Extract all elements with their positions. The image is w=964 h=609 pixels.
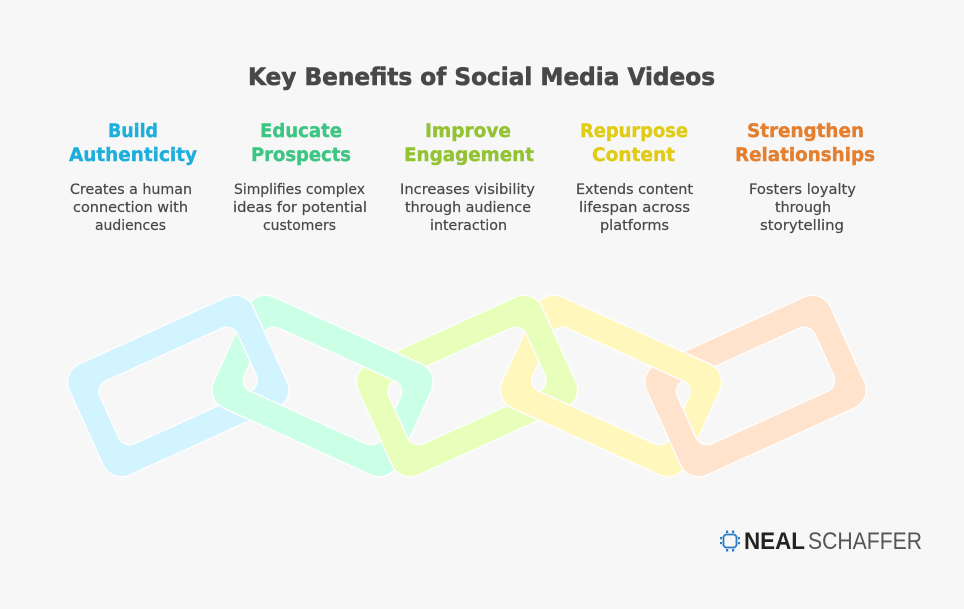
chain of five interlocking links <box>61 289 873 483</box>
description: Strengthen Relationships <box>749 182 856 234</box>
link: blue <box>61 289 295 483</box>
description: Improve Engagement: Increases visibility <box>400 182 535 198</box>
column: Strengthen Relationships <box>735 120 875 234</box>
column: Improve Engagement <box>400 120 535 234</box>
heading: Improve Engagement: Engagement <box>404 144 534 166</box>
description: Improve Engagement <box>400 182 535 234</box>
description: Build Authenticity: audiences <box>95 218 166 234</box>
link: green <box>205 289 440 483</box>
description: Educate Prospects: Simplifies complex <box>234 182 365 198</box>
heading: Strengthen Relationships: Relationships <box>735 144 875 166</box>
heading: Improve Engagement: Improve <box>425 120 511 142</box>
description: Build Authenticity: Creates a human <box>70 182 192 198</box>
wordmark <box>744 528 922 555</box>
description: Build Authenticity: connection with <box>73 200 188 216</box>
link: lime <box>350 289 584 483</box>
heading: Educate Prospects: Educate <box>260 120 342 142</box>
description: Improve Engagement: interaction <box>430 218 507 234</box>
description: Educate Prospects: customers <box>263 218 336 234</box>
description: Strengthen Relationships: Fosters loyalty <box>749 182 856 198</box>
heading: Improve Engagement <box>404 120 534 166</box>
heading: Repurpose Content: Content <box>592 144 675 166</box>
heading: Strengthen Relationships <box>735 120 875 166</box>
description: Repurpose Content <box>576 182 694 234</box>
wordmark: NEAL <box>744 528 805 555</box>
description: Strengthen Relationships: storytelling <box>760 218 844 234</box>
description: Educate Prospects: ideas for potential <box>233 200 367 216</box>
title: Key Benefits of Social Media Videos <box>248 63 715 91</box>
description: Strengthen Relationships: through <box>775 200 831 216</box>
link: lime overlap over yellow <box>483 302 571 405</box>
column: Build Authenticity <box>69 120 198 234</box>
heading: Educate Prospects: Prospects <box>251 144 351 166</box>
link: green overlap over lime <box>364 352 426 384</box>
heading: Build Authenticity <box>69 120 198 166</box>
link: yellow overlap over orange <box>625 330 717 397</box>
description: Repurpose Content: platforms <box>600 218 669 234</box>
heading: Repurpose Content: Repurpose <box>580 120 688 142</box>
heading: Strengthen Relationships: Strengthen <box>747 120 864 142</box>
heading: Build Authenticity: Build <box>108 120 158 142</box>
heading: Repurpose Content <box>580 120 688 166</box>
heading: Build Authenticity: Authenticity <box>69 144 198 166</box>
description: Improve Engagement: through audience <box>405 200 531 216</box>
link: blue overlap over green <box>195 302 282 404</box>
logo: Neal Schaffer <box>720 528 922 555</box>
heading: Educate Prospects <box>251 120 351 166</box>
description: Educate Prospects <box>233 182 367 234</box>
column: Repurpose Content <box>576 120 694 234</box>
description: Repurpose Content: Extends content <box>576 182 694 198</box>
description: Build Authenticity <box>70 182 192 234</box>
link: yellow <box>494 289 728 483</box>
link: orange <box>638 289 873 483</box>
description: Repurpose Content: lifespan across <box>579 200 690 216</box>
column: Educate Prospects <box>233 120 367 234</box>
icon: blue chip <box>720 530 740 552</box>
wordmark: SCHAFFER <box>808 528 922 555</box>
